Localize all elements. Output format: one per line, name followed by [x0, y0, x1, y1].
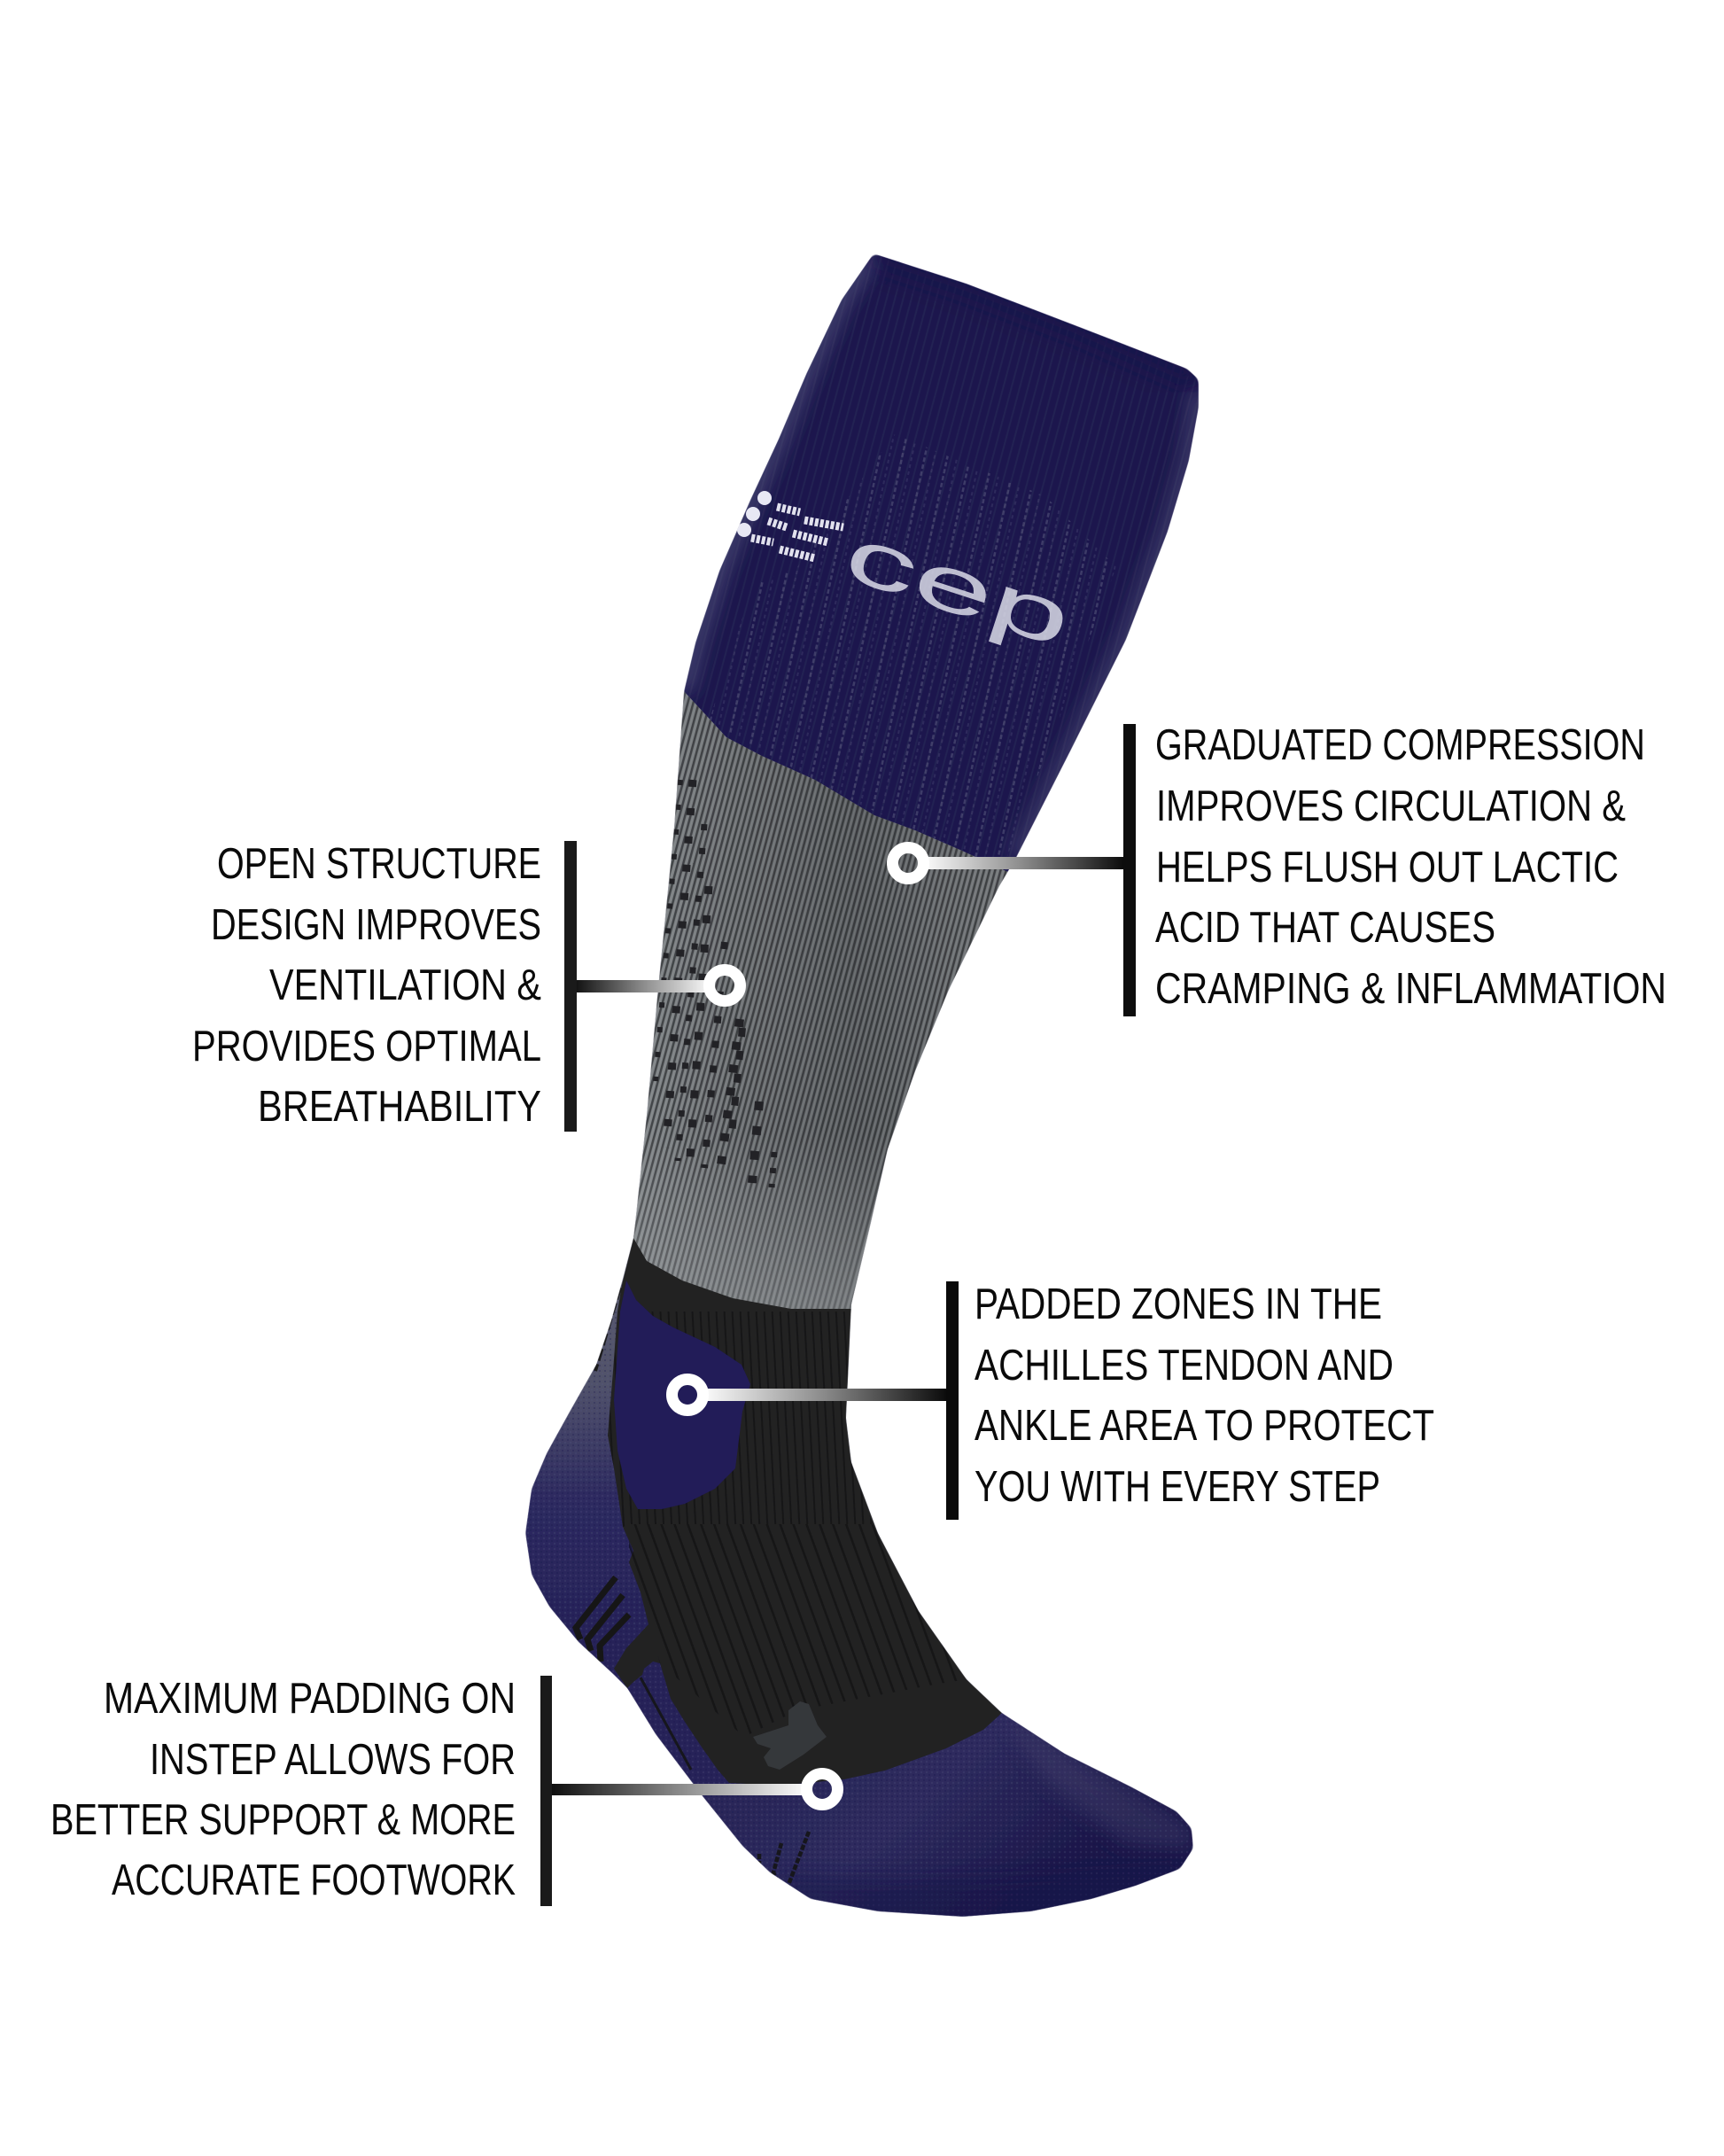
sock top cuff: navy: [514, 239, 1223, 1923]
heel and foot side: blue shell: [525, 1239, 789, 1886]
ankle brand mark: [753, 1701, 827, 1770]
edge highlight: [684, 253, 874, 691]
callout: graduated compression: [893, 721, 1666, 1016]
bracket bar: [540, 1676, 552, 1906]
open structure ventilation dots: [656, 780, 774, 1187]
compression sock illustration: [496, 239, 1223, 1950]
text block: MAXIMUM PADDING ON: [104, 1675, 516, 1723]
marker ring: [893, 847, 923, 879]
text block: OPEN STRUCTURE: [217, 840, 541, 888]
sock calf: grey section: [620, 691, 1010, 1320]
connector line: [921, 857, 1125, 869]
text block: YOU WITH EVERY STEP: [975, 1463, 1380, 1511]
logo: cep: [737, 491, 1083, 664]
toe shadow: [782, 1859, 1182, 1917]
marker ring: [672, 1379, 703, 1411]
toe highlight: [1019, 1732, 1192, 1861]
marker ring: [709, 969, 741, 1001]
text block: [50, 1675, 516, 1904]
logo: cep: cep: [835, 509, 1083, 664]
text block: PADDED ZONES IN THE: [975, 1280, 1382, 1328]
text block: [1155, 721, 1666, 1013]
bracket bar: [946, 1281, 959, 1520]
text block: VENTILATION &: [269, 961, 541, 1009]
text block: ANKLE AREA TO PROTECT: [975, 1402, 1434, 1450]
foot side strip line: [641, 1677, 691, 1770]
text block: IMPROVES CIRCULATION &: [1156, 782, 1626, 830]
connector line: [547, 1784, 811, 1795]
marker ring: [806, 1774, 838, 1804]
outer heel stitch: [595, 1288, 620, 1371]
connector line: [700, 1389, 948, 1401]
text block: [975, 1280, 1434, 1511]
padded ankle zone: [614, 1280, 750, 1509]
callout: maximum padding: [50, 1675, 838, 1906]
text block: ACCURATE FOOTWORK: [112, 1856, 516, 1904]
text block: [192, 840, 541, 1131]
heel grip lines: [576, 1577, 629, 1662]
text block: ACID THAT CAUSES: [1155, 904, 1495, 952]
toe cap: [702, 1713, 1193, 1917]
text block: ACHILLES TENDON AND: [975, 1342, 1394, 1389]
text block: PROVIDES OPTIMAL: [192, 1023, 541, 1070]
sole grip lines: [759, 1832, 809, 1889]
bracket bar: [564, 841, 577, 1132]
text block: BETTER SUPPORT & MORE: [50, 1796, 516, 1844]
text block: BREATHABILITY: [258, 1083, 541, 1131]
callout: open structure: [192, 840, 741, 1132]
heel knit texture: [526, 1243, 726, 1784]
connector line: [571, 980, 713, 992]
text block: HELPS FLUSH OUT LACTIC: [1156, 844, 1619, 891]
callout: padded zones: [672, 1280, 1434, 1520]
bracket bar: [1123, 724, 1136, 1016]
text block: INSTEP ALLOWS FOR: [150, 1736, 516, 1784]
sock ankle: black section: [608, 1238, 1002, 1786]
text block: DESIGN IMPROVES: [211, 901, 541, 949]
